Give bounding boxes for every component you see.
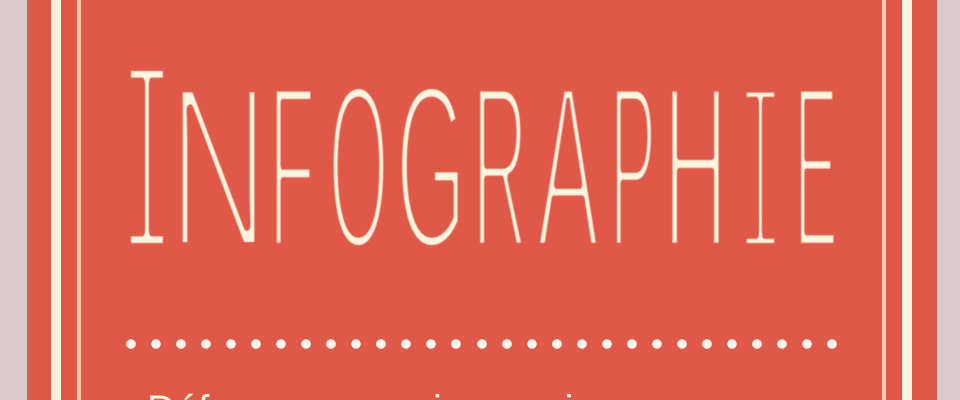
- title: H: [663, 35, 728, 298]
- title: G: [396, 36, 466, 298]
- title: A: [537, 35, 599, 298]
- title: P: [610, 35, 656, 298]
- title: O: [328, 37, 389, 299]
- title: I: [736, 42, 785, 326]
- title: N: [168, 37, 269, 299]
- title: E: [794, 35, 838, 298]
- title: [120, 15, 838, 337]
- dotted separator: [126, 339, 837, 349]
- title: F: [269, 35, 315, 298]
- title: R: [472, 37, 528, 299]
- title: I: [120, 15, 174, 337]
